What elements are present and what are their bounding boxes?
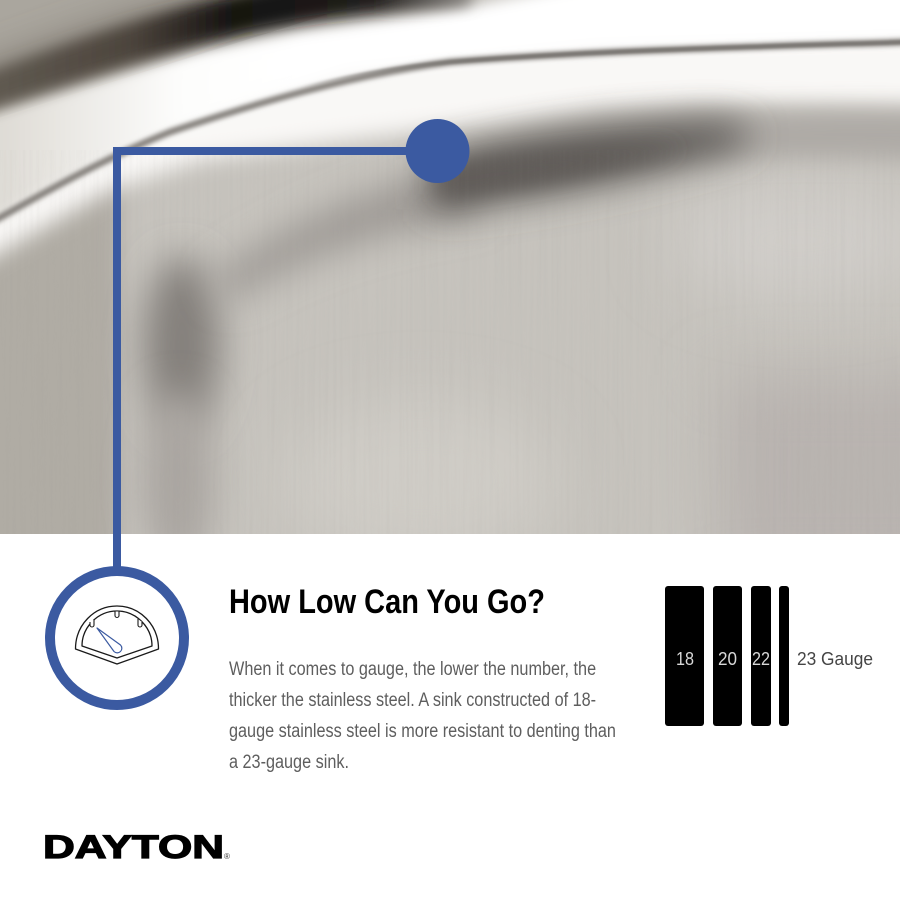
bar 18 gauge: 18 xyxy=(676,649,694,669)
soft halo around the streak xyxy=(0,0,470,122)
gray upper left metal xyxy=(0,0,302,110)
body text: thicker the stainless steel. A sink constructed of 18- xyxy=(229,690,596,711)
heading: How Low Can You Go? xyxy=(229,583,545,621)
shadow tail xyxy=(210,165,480,300)
body text: When it comes to gauge, the lower the number, the xyxy=(229,659,596,680)
marker dot xyxy=(406,119,470,183)
bar 23 gauge xyxy=(779,586,873,726)
icon: gauge in ring xyxy=(45,566,189,710)
body text xyxy=(229,659,616,773)
bar 20 gauge xyxy=(713,586,742,726)
bar 23 gauge: 23 Gauge xyxy=(797,649,873,669)
bar 18 gauge xyxy=(665,586,704,726)
photo: brushed stainless steel sink xyxy=(0,0,900,534)
thin groove xyxy=(0,41,900,240)
gauge comparison chart xyxy=(665,586,873,726)
logo: Dayton: ® xyxy=(224,852,230,861)
brushed grain xyxy=(0,150,900,534)
dark streak xyxy=(0,0,470,118)
off-white rim under the groove xyxy=(0,30,900,275)
bar 20 gauge: 20 xyxy=(718,649,737,669)
logo: Dayton: DAYTON xyxy=(43,829,224,865)
body text: a 23-gauge sink. xyxy=(229,752,349,773)
dark shadow xyxy=(430,122,750,210)
wide gray top of the shadow xyxy=(553,100,900,164)
bar 22 gauge: 22 xyxy=(752,649,770,669)
bright lip xyxy=(0,0,900,214)
body text: gauge stainless steel is more resistant to denting than xyxy=(229,721,616,742)
bar 22 gauge xyxy=(751,586,771,726)
